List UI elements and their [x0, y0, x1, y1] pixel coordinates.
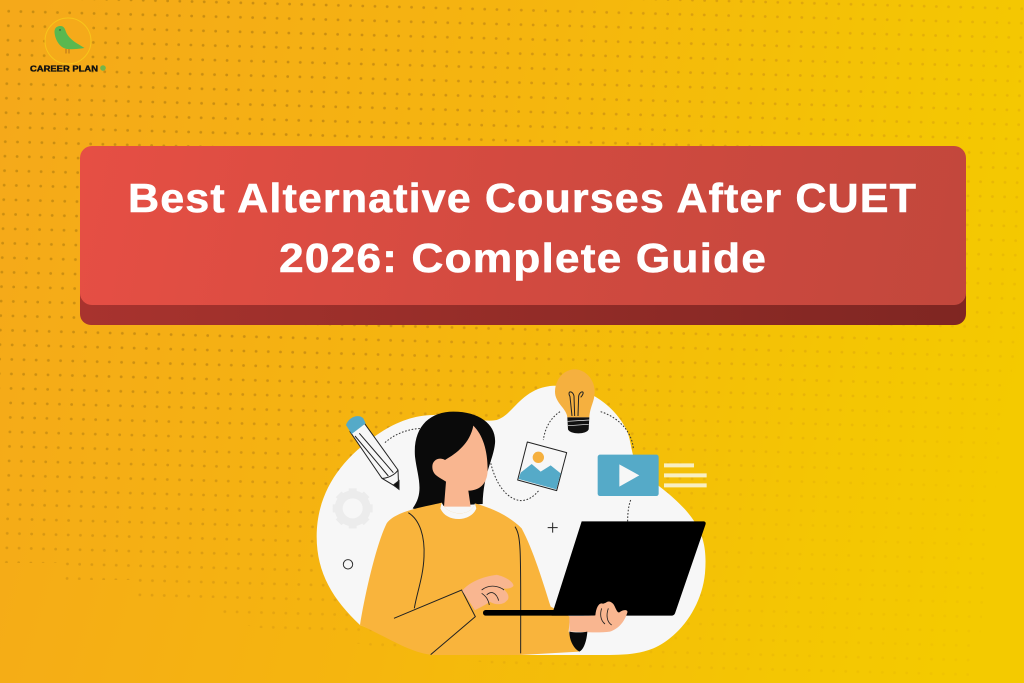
person: [360, 412, 706, 655]
icon: video player: [598, 455, 707, 496]
collar: [440, 503, 476, 519]
title: 2026: Complete Guide: [279, 235, 767, 281]
dashed connectors: [385, 412, 633, 521]
icon: image card: [518, 442, 567, 491]
video lines: [664, 465, 707, 485]
title banner: [80, 146, 966, 325]
title: Best Alternative Courses After CUET: [128, 175, 917, 221]
illustration: woman with laptop: [317, 369, 707, 655]
sleeve cuff: [569, 632, 587, 652]
logo wordmark: CAREER PLAN: [30, 64, 98, 74]
icon: gear: [333, 488, 373, 528]
face and neck: [432, 426, 488, 507]
banner base: [80, 200, 966, 325]
laptop: [483, 521, 706, 616]
logo: Career Plan: [30, 18, 106, 74]
icon: pencil: [346, 416, 399, 489]
cloud backdrop: [317, 386, 706, 655]
hand on laptop: [462, 575, 513, 610]
hand holding laptop: [569, 602, 627, 632]
sweater: [360, 503, 579, 655]
icon: plus: [548, 523, 558, 533]
icon: light bulb: [555, 369, 595, 433]
banner face: [80, 146, 966, 305]
icon: small circle: [343, 560, 353, 569]
icon: logo ring with bird: [45, 18, 91, 64]
title: [128, 175, 917, 281]
hair: [413, 412, 495, 509]
sweater fold lines: [394, 513, 521, 655]
logo mark dot: [100, 65, 106, 71]
